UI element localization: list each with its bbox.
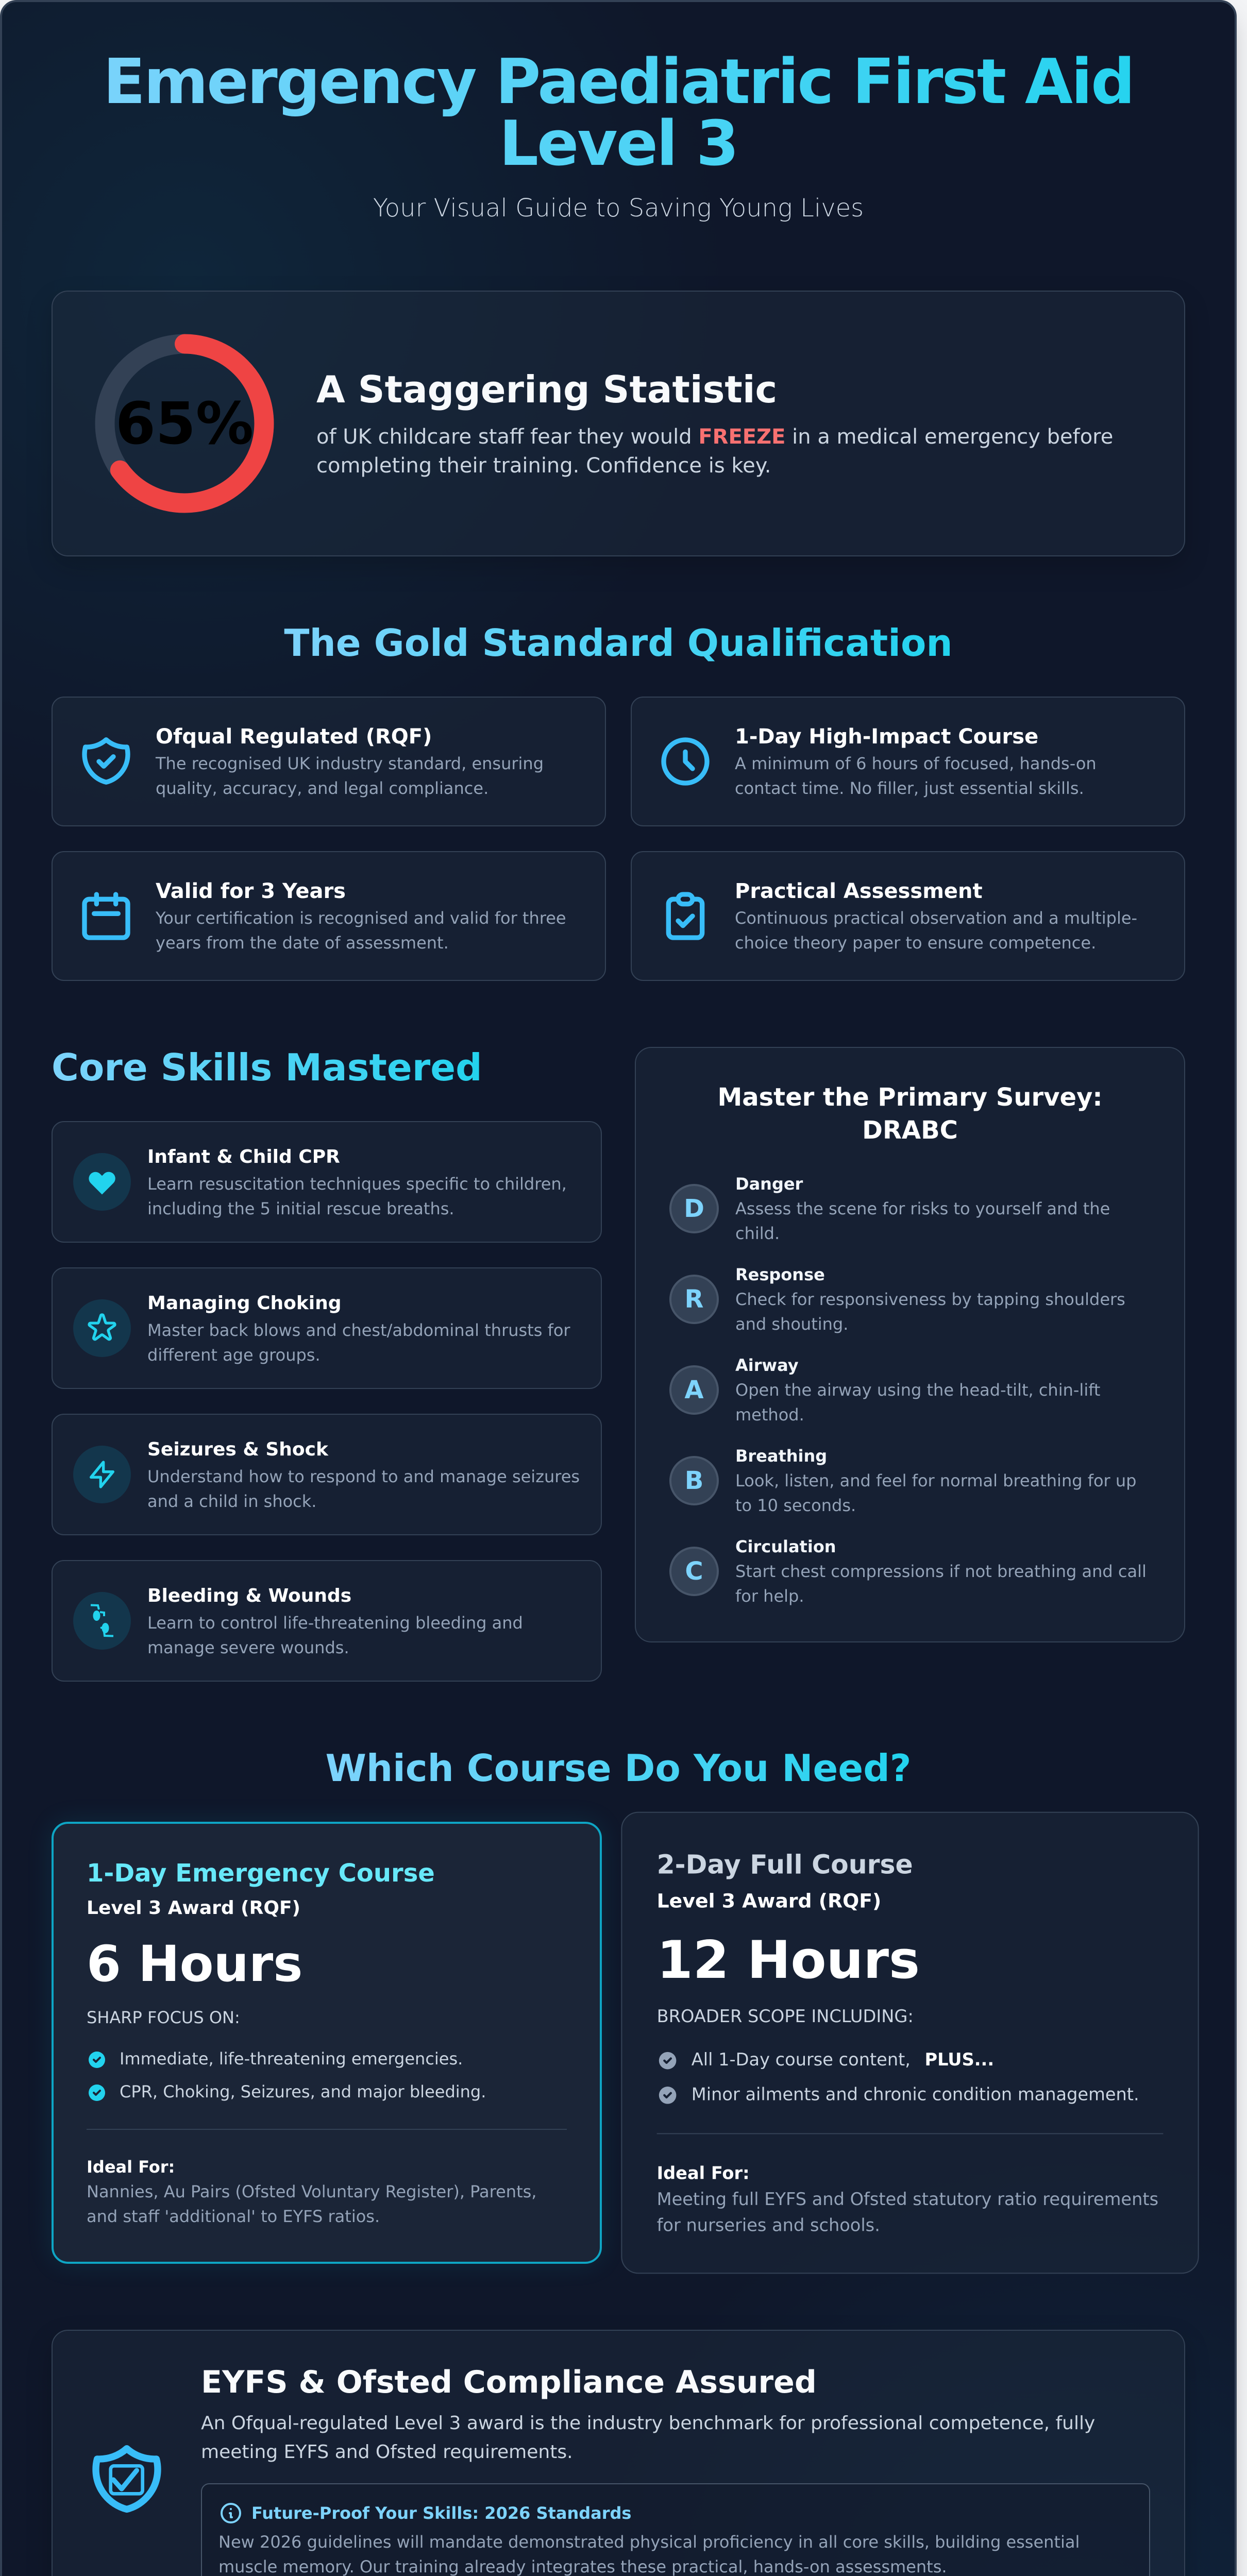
skill: infant and child cpr <box>52 1121 602 1243</box>
panel: 1-day emergency course: Level 3 Award (RQF) <box>87 1897 300 1919</box>
skill: infant and child cpr: including the 5 initial rescue breaths. <box>147 1199 454 1218</box>
panel: 2-day full course: for nurseries and schools. <box>657 2215 880 2235</box>
step: breathing: Look, listen, and feel for normal breathing for up <box>735 1471 1136 1490</box>
panel: 2-day full course: Ideal For: <box>657 2163 750 2183</box>
heading: a staggering statistic: A Staggering Statistic <box>316 368 777 411</box>
panel: valid for 3 years: Your certification is recognised and valid for three <box>156 908 566 928</box>
panel: practical assessment <box>631 851 1185 981</box>
panel: 1-day course: contact time. No filler, just essential skills. <box>735 778 1084 798</box>
callout: 2026 standards: New 2026 guidelines will mandate demonstrated physical proficiency in all core skills, building essential <box>218 2532 1080 2552</box>
panel: staggering statistic <box>52 291 1185 556</box>
panel: 2-day full course: Meeting full EYFS and Ofsted statutory ratio requirements <box>657 2189 1158 2209</box>
drabc heading: Master the Primary Survey: <box>717 1083 1103 1112</box>
panel: ofqual regulated <box>52 697 606 826</box>
panel: 1-day emergency course <box>52 1822 602 2264</box>
statistic text <box>316 425 1113 478</box>
panel: 1-day course: 1-Day High-Impact Course <box>735 725 1038 749</box>
step: danger: Danger <box>735 1174 803 1194</box>
panel: 1-day course <box>631 697 1185 826</box>
panel: 1-day emergency course: 6 Hours <box>87 1935 302 1993</box>
step: circulation: Circulation <box>735 1537 836 1556</box>
step: circulation: Start chest compressions if not breathing and call <box>735 1562 1147 1581</box>
panel: 2-day full course <box>621 1812 1199 2274</box>
panel: ofqual regulated: Ofqual Regulated (RQF) <box>156 725 432 749</box>
panel: ofqual regulated: The recognised UK industry standard, ensuring <box>156 754 544 773</box>
subtitle: Your Visual Guide to Saving Young Lives <box>373 194 864 223</box>
skill: bleeding and wounds: manage severe wounds. <box>147 1638 349 1657</box>
panel: 2-day full course: Level 3 Award (RQF) <box>657 1890 881 1912</box>
skill: seizures and shock <box>52 1414 602 1535</box>
title: Emergency Paediatric First Aid <box>103 46 1134 118</box>
step: airway: A <box>684 1376 704 1404</box>
panel: 1-day emergency course: 1-Day Emergency Course <box>87 1859 435 1888</box>
step: danger: child. <box>735 1224 780 1243</box>
panel: 1-day emergency course: SHARP FOCUS ON: <box>87 2008 240 2027</box>
donut chart: 65 percent <box>95 334 274 513</box>
panel: practical assessment: choice theory paper to ensure competence. <box>735 933 1096 953</box>
panel: 1-day emergency course: and staff 'additional' to EYFS ratios. <box>87 2207 380 2226</box>
callout: 2026 standards: muscle memory. Our training already integrates these practical, hands-on assessments. <box>218 2557 947 2576</box>
step: danger: D <box>684 1194 704 1223</box>
panel: 2-day full course: Minor ailments and chronic condition management. <box>692 2084 1139 2105</box>
drabc heading: DRABC <box>862 1116 958 1145</box>
skill: bleeding and wounds <box>52 1560 602 1682</box>
step: response: R <box>685 1285 703 1314</box>
heading: which course: Which Course Do You Need? <box>325 1747 912 1790</box>
skill: infant and child cpr: Learn resuscitation techniques specific to children, <box>147 1174 567 1194</box>
panel: 1-day emergency course: Ideal For: <box>87 2157 175 2177</box>
skill: managing choking: different age groups. <box>147 1345 321 1365</box>
panel: valid for 3 years: years from the date of assessment. <box>156 933 449 953</box>
skill: managing choking: Master back blows and chest/abdominal thrusts for <box>147 1320 570 1340</box>
step: breathing <box>669 1446 1136 1515</box>
step: danger <box>669 1174 1110 1243</box>
compliance heading: EYFS & Ofsted Compliance Assured <box>201 2364 817 2400</box>
panel: 1-day emergency course: Nannies, Au Pairs (Ofsted Voluntary Register), Parents, <box>87 2182 536 2201</box>
panel: 1-day emergency course: CPR, Choking, Seizures, and major bleeding. <box>120 2082 486 2102</box>
step: breathing: to 10 seconds. <box>735 1496 856 1515</box>
panel: 2-day full course: All 1-Day course content, PLUS... <box>692 2049 994 2070</box>
step: airway: Airway <box>735 1355 799 1375</box>
step: danger: Assess the scene for risks to yourself and the <box>735 1199 1110 1218</box>
panel: valid for 3 years <box>52 851 606 981</box>
skill: bleeding and wounds: Bleeding & Wounds <box>147 1585 351 1606</box>
donut chart: 65 percent: 65% <box>115 391 254 457</box>
panel: eyfs and ofsted compliance <box>52 2330 1185 2576</box>
panel: 1-day emergency course: Immediate, life-threatening emergencies. <box>120 2049 463 2069</box>
panel: drabc primary survey <box>635 1047 1185 1642</box>
panel: practical assessment: Practical Assessment <box>735 879 983 903</box>
step: airway: Open the airway using the head-tilt, chin-lift <box>735 1380 1100 1400</box>
skill: managing choking <box>52 1267 602 1389</box>
step: airway <box>669 1355 1100 1425</box>
title <box>52 52 1185 175</box>
panel: practical assessment: Continuous practical observation and a multiple- <box>735 908 1137 928</box>
panel: 1-day course: A minimum of 6 hours of focused, hands-on <box>735 754 1097 773</box>
step: circulation <box>669 1537 1147 1606</box>
heading: gold standard: The Gold Standard Qualification <box>284 621 953 665</box>
panel: 2-day full course: 12 Hours <box>657 1930 920 1990</box>
panel: 2-day full course: BROADER SCOPE INCLUDING: <box>657 2006 914 2027</box>
step: response: and shouting. <box>735 1314 848 1334</box>
step: circulation: C <box>685 1557 703 1586</box>
step: response: Check for responsiveness by tapping shoulders <box>735 1290 1125 1309</box>
heading: core skills: Core Skills Mastered <box>52 1046 482 1089</box>
statistic text: completing their training. Confidence is key. <box>316 454 771 478</box>
callout: 2026 standards: Future-Proof Your Skills: 2026 Standards <box>251 2503 631 2523</box>
step: response: Response <box>735 1265 825 1284</box>
skill: bleeding and wounds: Learn to control life-threatening bleeding and <box>147 1613 523 1633</box>
panel: ofqual regulated: quality, accuracy, and legal compliance. <box>156 778 488 798</box>
skill: seizures and shock: and a child in shock. <box>147 1492 316 1511</box>
icon: compliance shield <box>92 2445 161 2513</box>
callout: 2026 standards <box>201 2483 1150 2576</box>
compliance text <box>201 2413 1095 2463</box>
compliance text: meeting EYFS and Ofsted requirements. <box>201 2442 573 2463</box>
skill: managing choking: Managing Choking <box>147 1293 342 1314</box>
panel: 2-day full course: 2-Day Full Course <box>657 1850 913 1880</box>
skill: seizures and shock: Understand how to respond to and manage seizures <box>147 1467 580 1486</box>
drabc heading <box>717 1083 1103 1145</box>
step: breathing: B <box>685 1466 703 1495</box>
panel: valid for 3 years: Valid for 3 Years <box>156 879 346 903</box>
step: response <box>669 1265 1125 1334</box>
step: breathing: Breathing <box>735 1446 827 1466</box>
title: Level 3 <box>499 108 737 180</box>
statistic text: of UK childcare staff fear they would FREEZE in a medical emergency before <box>316 425 1113 449</box>
step: circulation: for help. <box>735 1586 804 1606</box>
skill: infant and child cpr: Infant & Child CPR <box>147 1146 340 1167</box>
step: airway: method. <box>735 1405 804 1425</box>
skill: seizures and shock: Seizures & Shock <box>147 1439 328 1460</box>
compliance text: An Ofqual-regulated Level 3 award is the industry benchmark for professional competence, fully <box>201 2413 1095 2434</box>
